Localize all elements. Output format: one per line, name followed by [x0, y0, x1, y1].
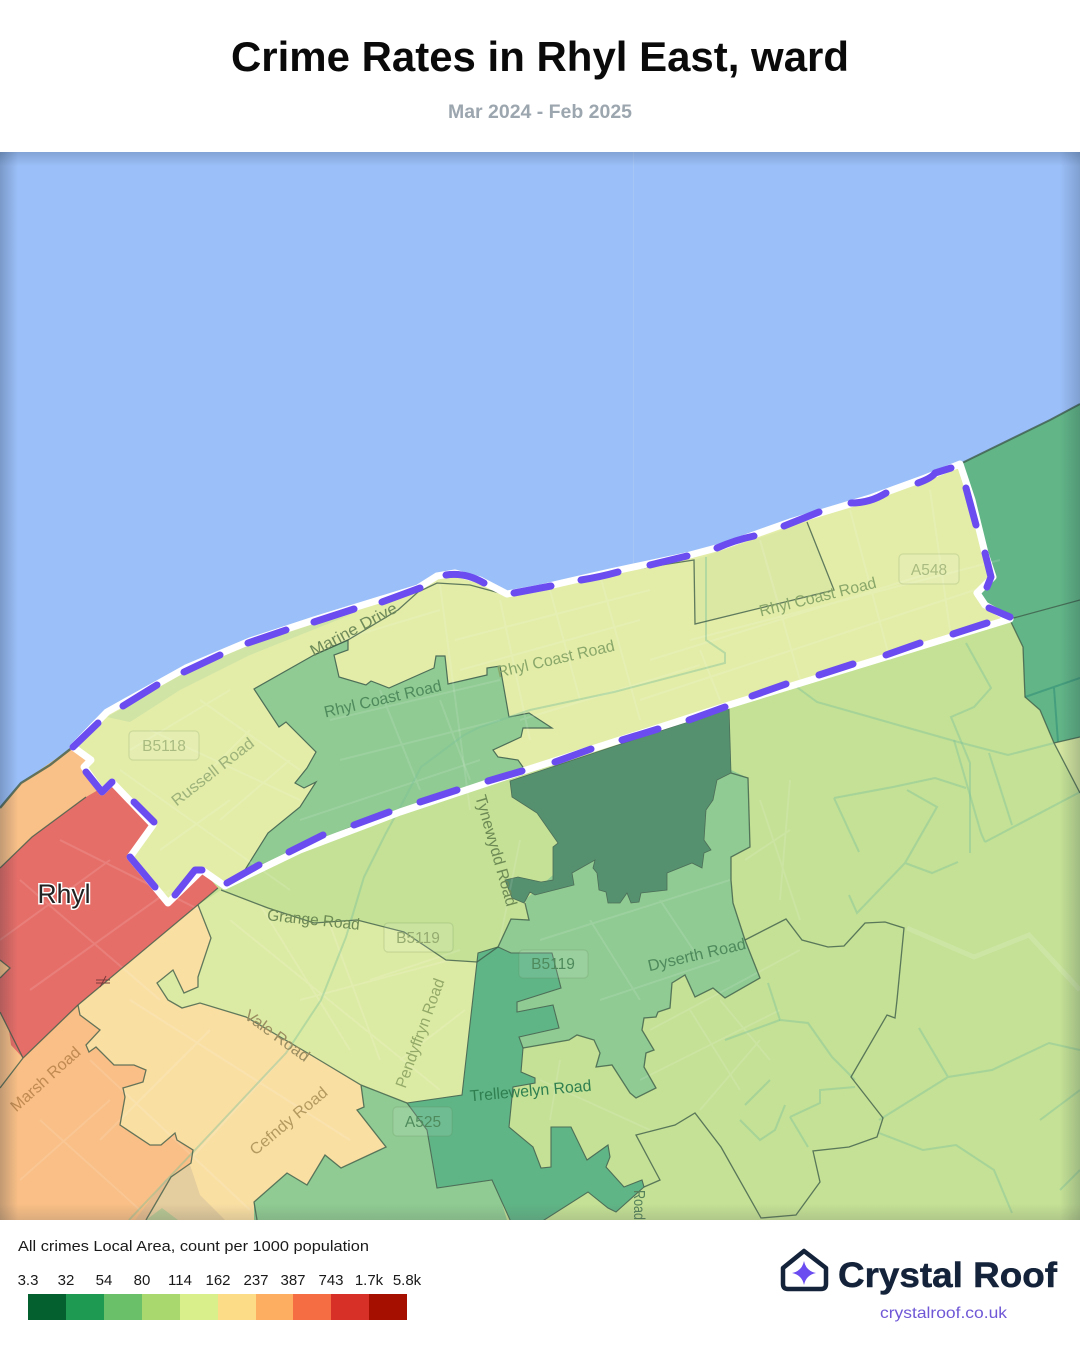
logo wordmark: Crystal Roof — [838, 1256, 1057, 1295]
road badge: B5118: B5118 — [142, 738, 186, 755]
area: coastal strip — [107, 615, 350, 722]
area: far east light — [1054, 737, 1080, 793]
legend values: 3.3 — [18, 1272, 38, 1289]
road badge: B5118 — [129, 731, 199, 760]
area: orange Marsh Road — [0, 1005, 193, 1220]
road labels — [8, 575, 878, 1220]
area: medium green Dyserth Road — [498, 770, 760, 1098]
title: Crime Rates in Rhyl East, ward — [231, 33, 849, 80]
legend values: 114 — [168, 1272, 192, 1289]
road network — [0, 490, 1080, 1210]
land base: rural area — [0, 600, 1080, 1220]
legend values: 387 — [280, 1272, 306, 1289]
road badge: A525: A525 — [405, 1114, 441, 1131]
legend values: 5.8k — [393, 1272, 422, 1289]
road labels: Russell Road — [169, 735, 258, 810]
road badge: A525 — [393, 1107, 452, 1136]
road labels: Rhyl Coast Road — [323, 678, 443, 721]
legend — [18, 1238, 422, 1320]
road labels: Dyserth Road — [646, 936, 748, 975]
area: medium green south west — [254, 1085, 507, 1220]
area: east coast green — [960, 404, 1080, 745]
road badge: B5119 west: B5119 — [396, 930, 440, 947]
area: dark green — [505, 708, 731, 903]
area: medium green inside ward — [243, 640, 552, 873]
road labels: Pendyffryn Road — [393, 977, 448, 1090]
legend values: 743 — [318, 1272, 344, 1289]
area: light orange south of Rhyl — [78, 906, 386, 1220]
legend values: 237 — [243, 1272, 269, 1289]
legend values: 54 — [96, 1272, 112, 1289]
area: red Rhyl — [0, 782, 218, 1058]
area boundaries — [0, 404, 1080, 1220]
road labels: Rhyl Coast Road — [758, 575, 878, 620]
road labels: Road — [630, 1190, 647, 1220]
legend values: 1.7k — [355, 1272, 384, 1289]
map edge vignette — [0, 152, 1080, 1220]
sea — [0, 152, 1080, 808]
legend heading: All crimes Local Area, count per 1000 population — [18, 1238, 369, 1255]
road badge: A548 — [899, 554, 959, 584]
area: pale green Grange Road — [157, 890, 477, 1103]
road labels: Marine Drive — [308, 600, 400, 660]
legend colour scale — [28, 1294, 407, 1320]
road badge: B5119 west — [384, 923, 453, 952]
legend values — [18, 1272, 422, 1289]
ward boundary: white casing — [73, 464, 1010, 903]
road badge: B5119 east: B5119 — [531, 956, 575, 973]
area: block in ward north — [694, 522, 834, 624]
place label: Rhyl: Rhyl — [38, 879, 90, 909]
road badge: A548: A548 — [911, 562, 947, 579]
road labels: Tynewydd Road — [471, 793, 519, 908]
ward boundary: purple dashes — [73, 468, 1010, 895]
area: orange north west — [0, 750, 96, 868]
icon: house with star — [783, 1251, 826, 1289]
area: orange west notch — [0, 960, 10, 978]
streams — [129, 557, 1080, 1220]
area: teal green Trellewelyn — [407, 947, 644, 1222]
road badge: B5119 east — [519, 950, 588, 978]
legend values: 162 — [205, 1272, 231, 1289]
road labels: Marsh Road — [8, 1044, 84, 1115]
icon: rail station — [96, 976, 110, 987]
road labels: Rhyl Coast Road — [496, 638, 616, 681]
area: orange west sliver — [0, 1013, 22, 1087]
subtitle: date range: Mar 2024 - Feb 2025 — [448, 102, 632, 123]
logo url: crystalroof.co.uk — [880, 1305, 1008, 1322]
road labels: Grange Road — [266, 907, 361, 934]
logo: Crystal Roof — [783, 1251, 1057, 1322]
legend values: 32 — [58, 1272, 74, 1289]
road labels: Trellewelyn Road — [469, 1078, 592, 1105]
road labels: Vale Road — [241, 1007, 312, 1066]
area: grey foreshore patch — [135, 1165, 225, 1220]
road labels: Cefndy Road — [247, 1084, 331, 1159]
legend values: 80 — [134, 1272, 150, 1289]
choropleth map — [0, 152, 1080, 1222]
area: Rhyl East ward base — [73, 464, 1010, 903]
area: small green patch at bottom — [146, 1208, 178, 1220]
